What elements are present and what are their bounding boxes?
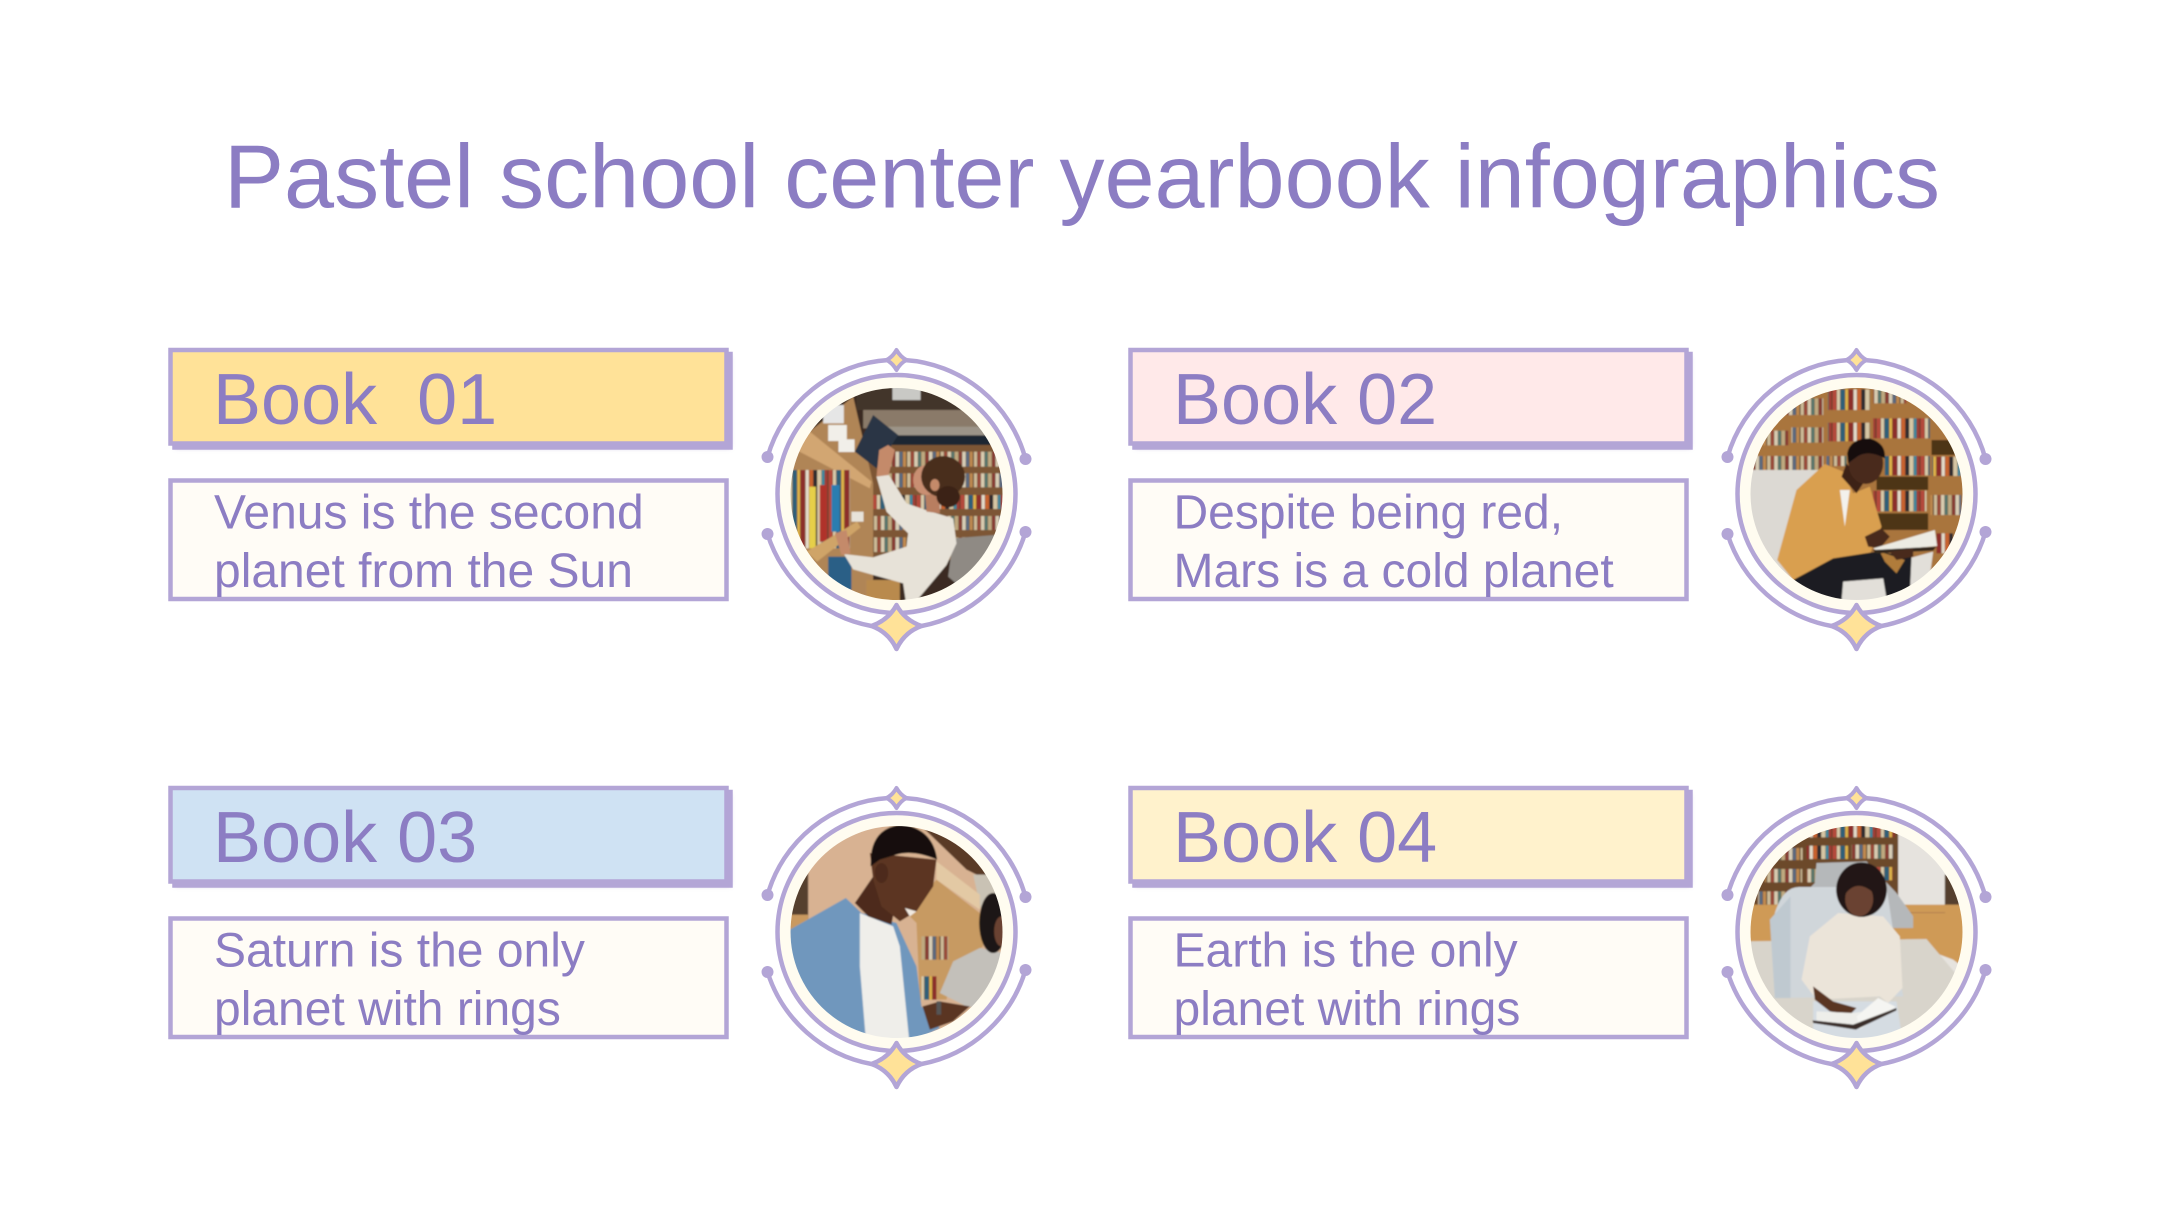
description: book 01: planet from the Sun [214, 545, 633, 598]
medallion: book 03 [762, 788, 1032, 1087]
description box: book 01 [170, 480, 726, 599]
panel: book 02 [1130, 350, 1691, 599]
description box: book 02 [1130, 480, 1686, 599]
heading: book 04: Book 04 [1173, 798, 1437, 878]
photo: student reaching for a book on library shelf [787, 383, 1006, 607]
heading: book 03: Book 03 [213, 798, 477, 878]
description: book 03: Saturn is the only [214, 924, 585, 978]
medallion: book 04 [1722, 788, 1992, 1087]
description: book 04: planet with rings [1174, 983, 1520, 1036]
description: book 02: Despite being red, [1174, 486, 1563, 540]
panel: book 01 [170, 350, 731, 599]
description: book 03: planet with rings [214, 983, 561, 1036]
panel: book 03 [170, 788, 731, 1037]
photo: woman reading on a white armchair [1747, 821, 1966, 1045]
photo: smiling student in denim shirt in library [787, 821, 1009, 1045]
title: Pastel school center yearbook infographics [224, 128, 1940, 228]
heading box: book 02 [1130, 350, 1686, 444]
photo: man in orange jacket reading on sofa [1747, 383, 1966, 607]
heading: book 02: Book 02 [1173, 360, 1437, 440]
heading box: book 01 [170, 350, 726, 444]
description box: book 04 [1130, 918, 1686, 1037]
description: book 02: Mars is a cold planet [1174, 545, 1614, 598]
medallion: book 02 [1722, 350, 1992, 649]
heading box: book 03 [170, 788, 726, 882]
description: book 01: Venus is the second [214, 486, 644, 540]
heading: book 01: Book 01 [213, 360, 497, 440]
description box: book 03 [170, 918, 726, 1037]
panel: book 04 [1130, 788, 1691, 1037]
description: book 04: Earth is the only [1174, 924, 1518, 978]
medallion: book 01 [762, 350, 1032, 649]
heading box: book 04 [1130, 788, 1686, 882]
